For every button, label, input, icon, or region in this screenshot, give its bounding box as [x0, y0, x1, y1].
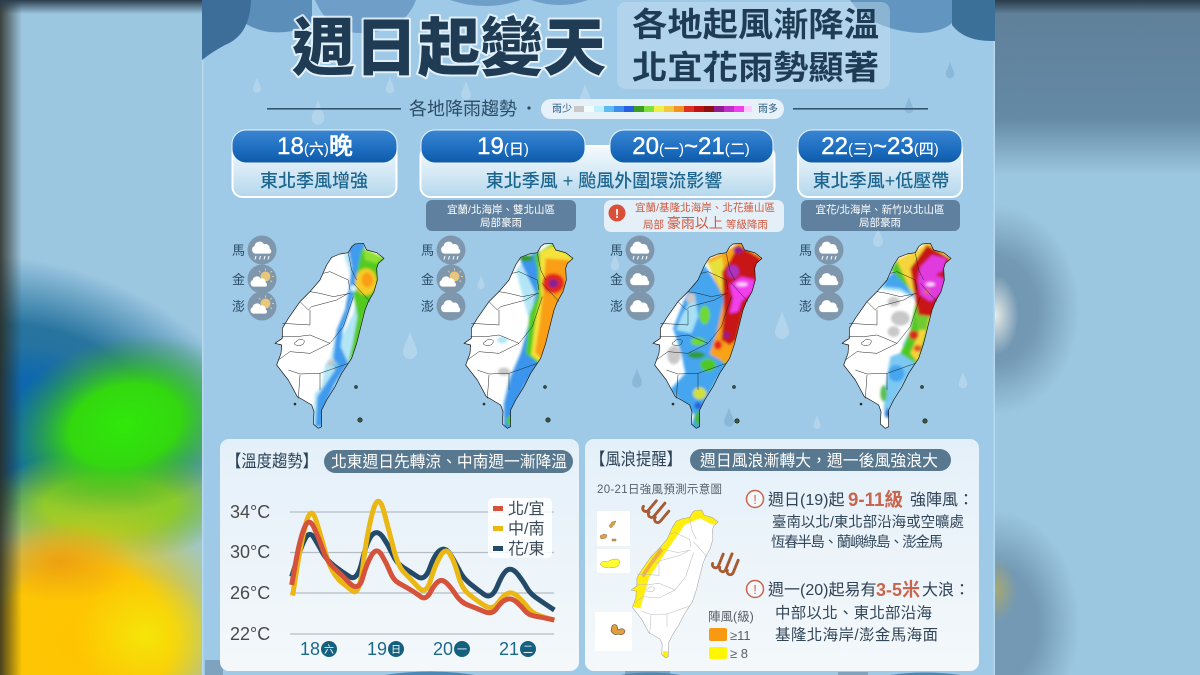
wind summary pill: 週日風浪漸轉大，週一後風強浪大	[700, 452, 938, 470]
card: 19 to 21: 20(一)~21(二)	[632, 133, 750, 160]
central poster background	[202, 0, 995, 675]
note: 22-23 heavy rain: 局部豪雨	[859, 216, 901, 229]
wave alert: 基隆北海岸/澎金馬海面	[775, 626, 938, 644]
outlying island weather: map 2: 馬	[421, 243, 434, 258]
chart legend: 北/宜	[508, 500, 544, 518]
outlying island weather: map 4	[799, 236, 844, 320]
wind alert	[746, 489, 974, 551]
wind icon: northwest	[641, 494, 671, 524]
date axis: 二	[523, 645, 533, 656]
card: 22 to 23	[798, 130, 962, 197]
wind alert: 臺南以北/東北部沿海或空曠處	[772, 514, 964, 531]
rainfall trend heading with colour scale	[267, 99, 928, 119]
temperature summary pill: 北東週日先轉涼、中南週一漸降溫	[331, 453, 567, 471]
wave alert: 大浪：	[922, 581, 970, 599]
raindrops	[253, 62, 967, 429]
outlying island weather: map 3: 金	[610, 272, 623, 287]
rainfall trend heading with colour scale: 雨少	[552, 103, 572, 115]
note: 19 heavy rain: 宜蘭/北海岸、雙北山區	[447, 203, 555, 216]
subtitle: 北宜花雨勢顯著	[632, 49, 879, 86]
date axis	[300, 639, 536, 659]
inset islands	[595, 511, 632, 651]
card: 19 to 21	[420, 130, 774, 197]
note: 20-21 warning: !	[615, 206, 619, 221]
wind alert: 恆春半島、蘭嶼綠島、澎金馬	[771, 534, 943, 551]
outlying island weather: map 3: 澎	[610, 299, 623, 314]
strong wind map of Taiwan	[630, 507, 720, 659]
outlying island weather: map 2: 金	[421, 272, 434, 287]
gust legend	[708, 610, 754, 661]
wind alert: 強陣風：	[910, 491, 974, 509]
temperature line chart: 30°C	[230, 542, 270, 562]
subtitle	[617, 2, 890, 89]
gust legend: 陣風(級)	[708, 610, 754, 624]
rainfall map: 20 to 21	[653, 242, 763, 430]
date axis: 日	[391, 645, 401, 656]
wave alert: 中部以北、東北部沿海	[775, 604, 932, 622]
note: 22-23 heavy rain: 宜花/北海岸、新竹以北山區	[816, 203, 944, 216]
temperature line chart: 22°C	[230, 624, 270, 644]
card: 22 to 23: 東北季風+低壓帶	[813, 171, 949, 191]
card: 18 Saturday night: 18(六)晚	[277, 133, 353, 160]
storm clouds	[202, 0, 995, 60]
note: 22-23 heavy rain	[801, 200, 960, 231]
wind alert: 週日(19)起	[768, 491, 844, 509]
chart legend: 花/東	[508, 540, 544, 558]
gust legend: ≥ 8	[730, 646, 748, 661]
chart legend: 中/南	[508, 520, 544, 538]
wave alert: !	[753, 582, 757, 597]
date axis: 20	[433, 639, 453, 659]
temperature line chart: 26°C	[230, 583, 270, 603]
panel: temperature trend	[220, 439, 579, 671]
temperature line chart	[230, 498, 554, 659]
wave alert: 3-5米	[876, 579, 920, 600]
temperature line chart: 34°C	[230, 502, 270, 522]
card: 18 Saturday night: 東北季風增強	[260, 171, 368, 191]
note: 19 heavy rain	[426, 200, 576, 231]
date axis: 一	[457, 645, 467, 656]
card: 22 to 23: 22(三)~23(四)	[821, 133, 939, 160]
wind alert: !	[753, 492, 757, 507]
note: 20-21 warning: 局部 豪雨以上 等級降雨	[643, 215, 768, 231]
note: 20-21 warning	[604, 200, 784, 232]
outlying island weather: map 3	[610, 236, 654, 320]
chart legend	[488, 498, 552, 558]
outlying island weather: map 2	[421, 236, 466, 320]
panel: wind and wave	[585, 439, 979, 671]
outlying island weather: map 1: 澎	[232, 299, 245, 314]
rainfall trend heading with colour scale: 雨多	[758, 102, 778, 115]
temperature heading: 【溫度趨勢】	[226, 452, 318, 471]
rainfall map: 19 Sunday	[464, 242, 574, 430]
wind icon: east	[711, 548, 740, 576]
note: 19 heavy rain: 局部豪雨	[480, 216, 522, 229]
wind alert: 9-11級	[848, 489, 903, 511]
outlying island weather: map 2: 澎	[421, 299, 434, 314]
outlying island weather: map 1: 馬	[232, 243, 245, 258]
outlying island weather: map 4: 馬	[799, 243, 812, 258]
city skyline at bottom	[205, 660, 960, 675]
outlying island weather: map 4: 金	[799, 272, 812, 287]
wave alert: 週一(20)起易有	[768, 581, 876, 599]
date axis: 19	[367, 639, 387, 659]
card: 19 to 21: 19(日)	[477, 133, 529, 160]
outlying island weather: map 1: 金	[232, 272, 245, 287]
outlying island weather: map 4: 澎	[799, 299, 812, 314]
date axis: 六	[324, 644, 334, 656]
rainfall map: 22 to 23	[842, 242, 952, 428]
date axis: 21	[499, 639, 519, 659]
title: 週日起變天	[292, 14, 606, 84]
card: 18 Saturday night	[232, 130, 397, 197]
date axis: 18	[300, 639, 320, 659]
rainfall trend heading with colour scale: 各地降雨趨勢	[409, 99, 517, 119]
outlying island weather: map 3: 馬	[610, 243, 623, 258]
offshore islets	[294, 386, 927, 423]
rainfall map: 18 Saturday night	[275, 242, 385, 430]
card: 19 to 21: 東北季風 + 颱風外圍環流影響	[486, 170, 722, 191]
wave alert	[746, 579, 970, 644]
gust legend: ≥11	[730, 628, 751, 643]
subtitle: 各地起風漸降溫	[632, 6, 879, 43]
wind map caption: 20-21日強風預測示意圖	[597, 482, 722, 496]
wind heading: 【風浪提醒】	[590, 450, 682, 469]
note: 20-21 warning: 宜蘭/基隆北海岸、北花蓮山區	[635, 201, 775, 214]
outlying island weather: map 1	[232, 236, 276, 320]
